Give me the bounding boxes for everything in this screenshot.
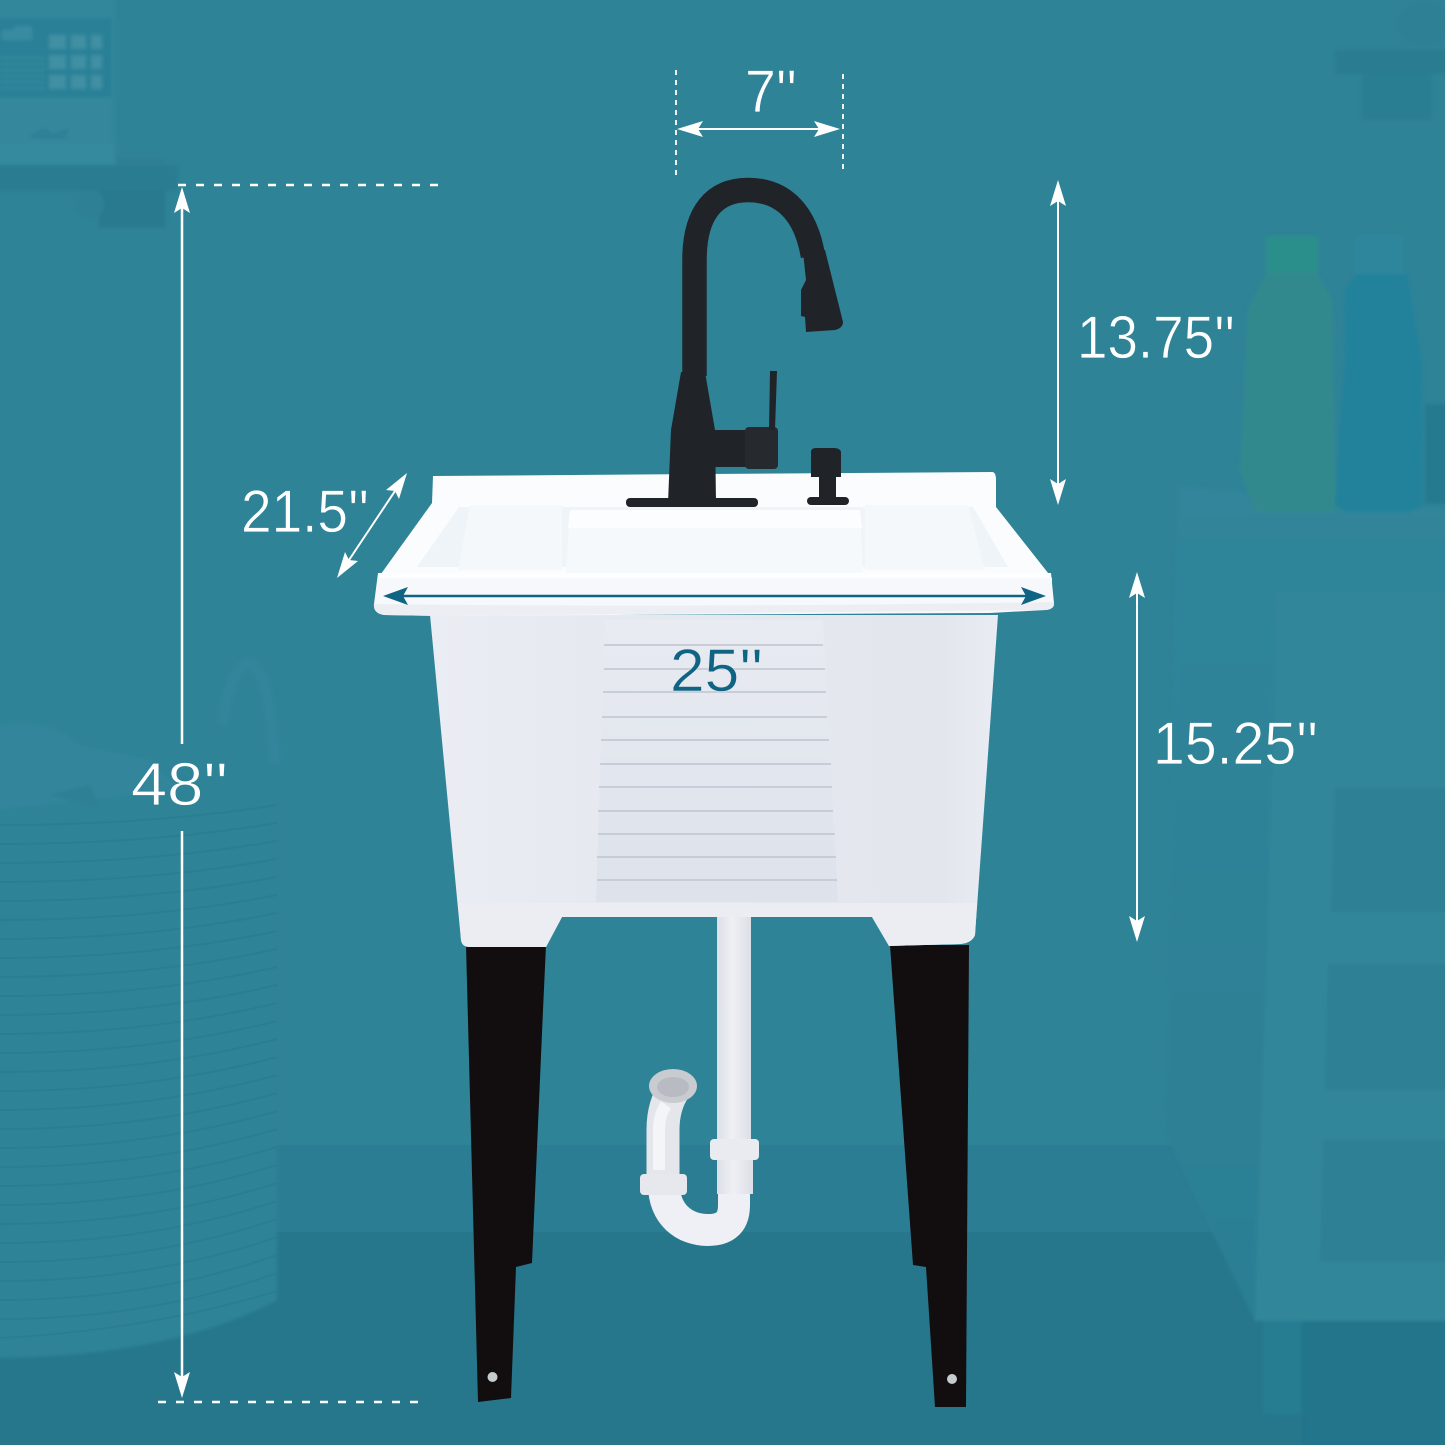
washboard ridges — [596, 620, 838, 902]
faucet gooseneck — [694, 190, 813, 376]
background: laundry basket — [0, 664, 277, 1358]
lever handle — [769, 371, 777, 430]
sink legs — [466, 945, 969, 1407]
background: wall poster — [0, 0, 115, 168]
dimension: 13.75 inch faucet height — [1050, 180, 1235, 505]
faucet — [626, 190, 843, 507]
background: basket weave lines — [0, 805, 277, 1338]
dimension: 13.75 inch faucet height: 13.75'' — [1077, 304, 1235, 371]
dimension: 25 inch width — [383, 587, 1046, 704]
front rim — [374, 573, 1054, 616]
dimension: 21.5 inch depth — [241, 473, 407, 578]
soap dispenser — [807, 448, 849, 505]
mixer valve — [706, 430, 748, 467]
background: right shelf — [1335, 0, 1445, 120]
background: left shelf with bracket — [0, 158, 178, 228]
tub interior — [417, 507, 1008, 567]
dimension: 25 inch width: 25'' — [670, 637, 763, 704]
dimension: 15.25 inch basin height: 15.25'' — [1153, 710, 1318, 777]
dimension: 15.25 inch basin height — [1129, 572, 1318, 942]
dimension: 7 inch spout reach — [676, 58, 843, 180]
background: bottles on cabinet — [1240, 236, 1445, 512]
deck plate — [626, 498, 758, 507]
sink basin — [374, 472, 1054, 947]
rear splash rim — [378, 472, 1052, 600]
drain pipe: P-trap — [640, 916, 759, 1230]
pull-down spray head — [801, 250, 843, 332]
faucet body — [668, 372, 716, 503]
right leg — [890, 945, 969, 1407]
dimension: 7 inch spout reach: 7'' — [745, 58, 797, 125]
dimension: 48 inch overall height — [131, 185, 440, 1402]
dimension: 48 inch overall height: 48'' — [131, 751, 228, 818]
dimension: 21.5 inch depth: 21.5'' — [241, 478, 369, 545]
left leg — [466, 945, 546, 1402]
background: cabinet — [1165, 486, 1445, 1445]
leg bolts — [488, 1372, 957, 1384]
